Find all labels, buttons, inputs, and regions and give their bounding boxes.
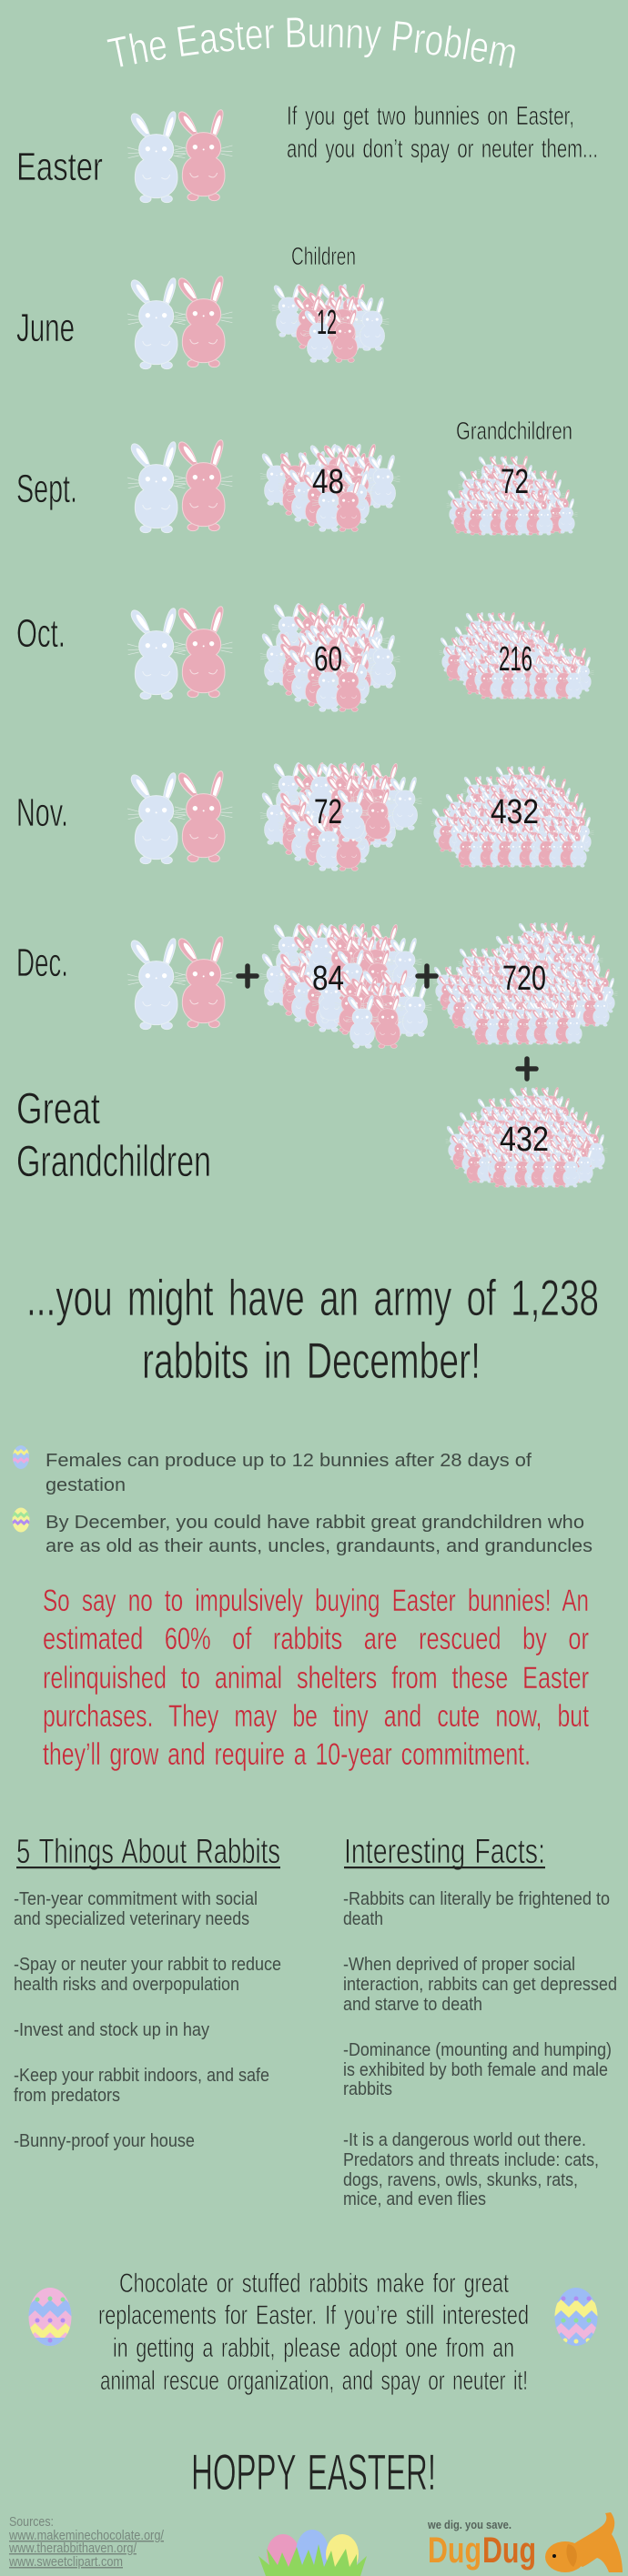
bunny pair <box>127 110 232 203</box>
month label: Oct. <box>16 611 66 656</box>
icon: easter egg <box>12 1507 30 1533</box>
list: -Keep your rabbit indoors, and safe <box>14 2066 269 2086</box>
headline: army of rabbits <box>26 1269 599 1389</box>
list: dogs, ravens, owls, skunks, rats, <box>343 2170 578 2190</box>
title: The Easter Bunny Problem <box>107 18 515 68</box>
icon: dog <box>545 2512 623 2572</box>
list: -Invest and stock up in hay <box>14 2020 209 2040</box>
bullet text <box>46 1451 532 1495</box>
list <box>343 1889 617 2209</box>
row: December <box>16 922 618 1048</box>
month label: Sept. <box>16 467 77 511</box>
bunny pair <box>127 937 232 1030</box>
list: and specialized veterinary needs <box>14 1909 249 1929</box>
headline: army of rabbits: rabbits in December! <box>142 1332 481 1389</box>
bullet text: are as old as their aunts, uncles, grandaunts, and granduncles <box>46 1536 593 1556</box>
count 216: 216 <box>499 640 532 679</box>
list: -When deprived of proper social <box>343 1955 575 1975</box>
bullet text: Females can produce up to 12 bunnies after 28 days of <box>46 1451 532 1471</box>
sources: www.makeminechocolate.org/ <box>8 2528 165 2543</box>
label: Grandchildren <box>16 1138 211 1186</box>
row: September <box>16 417 578 535</box>
bunny pair <box>127 277 232 369</box>
label: Great <box>16 1085 100 1133</box>
list <box>14 1889 281 2151</box>
title <box>107 18 515 68</box>
red call to action <box>43 1584 589 1772</box>
icon: easter egg <box>13 1445 29 1469</box>
list: Predators and threats include: cats, <box>343 2150 599 2170</box>
children cluster <box>260 762 421 870</box>
wordmark: Dug <box>482 2531 536 2571</box>
grandchildren heading: Grandchildren <box>456 417 572 445</box>
list: from predators <box>14 2086 120 2106</box>
grandchildren cluster <box>432 922 618 1044</box>
row: June <box>16 242 389 369</box>
panel: interesting facts <box>343 1833 617 2209</box>
wordmark <box>428 2531 536 2571</box>
children cluster <box>260 603 400 711</box>
label <box>16 1085 211 1186</box>
bullet text: gestation <box>46 1475 126 1495</box>
plus sign <box>418 966 436 986</box>
heading: Interesting Facts: <box>344 1833 545 1871</box>
month label: Nov. <box>16 790 68 835</box>
plus sign <box>518 1059 536 1079</box>
logo: DugDug <box>427 2512 623 2572</box>
intro text <box>287 102 598 164</box>
row: Easter <box>16 102 598 203</box>
sources: Sources: <box>9 2514 54 2530</box>
bunny pair <box>127 440 232 533</box>
list: -Bunny-proof your house <box>14 2131 195 2151</box>
callout: adopt instead <box>98 2269 529 2396</box>
count 720: 720 <box>502 960 546 998</box>
wordmark: Dug <box>428 2531 481 2571</box>
list: -Spay or neuter your rabbit to reduce <box>14 1955 281 1975</box>
count 12: 12 <box>317 304 337 342</box>
count 48: 48 <box>312 463 344 501</box>
icon: eggs in grass <box>258 2530 367 2576</box>
sources: www.sweetclipart.com <box>8 2554 123 2570</box>
count 72: 72 <box>501 463 529 501</box>
count 432: 432 <box>491 793 539 831</box>
list: death <box>343 1909 383 1929</box>
plus sign <box>238 966 257 986</box>
grandchildren cluster <box>439 612 594 699</box>
bullet: great grandchildren fact <box>12 1507 593 1556</box>
children cluster <box>260 444 400 531</box>
count 84: 84 <box>312 960 344 998</box>
count 72: 72 <box>314 793 342 831</box>
list: rabbits <box>343 2079 392 2099</box>
grandchildren cluster <box>430 766 594 867</box>
list: health risks and overpopulation <box>14 1975 239 1995</box>
month label: Dec. <box>16 941 68 985</box>
month label: June <box>16 306 75 350</box>
row: November <box>16 762 594 870</box>
list: and starve to death <box>343 1995 482 2015</box>
icon: pink easter egg <box>29 2288 71 2346</box>
row: October <box>16 603 594 711</box>
tagline: we dig. you save. <box>427 2518 512 2531</box>
children cluster <box>272 284 389 362</box>
icon: blue easter egg <box>555 2288 597 2346</box>
panel: 5 things about rabbits <box>14 1833 281 2151</box>
great grandchildren cluster <box>445 1087 608 1187</box>
row: Great Grandchildren <box>16 1085 608 1187</box>
list: -Ten-year commitment with social <box>14 1889 258 1909</box>
list: -It is a dangerous world out there. <box>343 2130 586 2150</box>
bullet text: By December, you could have rabbit great grandchildren who <box>46 1513 584 1533</box>
children cluster <box>260 923 431 1048</box>
closing heading: HOPPY EASTER! <box>191 2443 436 2501</box>
grandchildren cluster <box>446 456 578 535</box>
sources <box>8 2514 165 2570</box>
month label: Easter <box>16 145 103 189</box>
count 432: 432 <box>500 1121 549 1159</box>
sources: www.therabbithaven.org/ <box>8 2541 137 2556</box>
count 60: 60 <box>314 640 342 679</box>
bullet: gestation fact <box>12 1444 532 1495</box>
bunny pair <box>127 607 232 699</box>
heading: 5 Things About Rabbits <box>16 1833 280 1871</box>
children heading: Children <box>291 242 356 270</box>
bullet text <box>46 1513 593 1556</box>
list: mice, and even flies <box>343 2189 486 2209</box>
bunny pair <box>127 771 232 864</box>
